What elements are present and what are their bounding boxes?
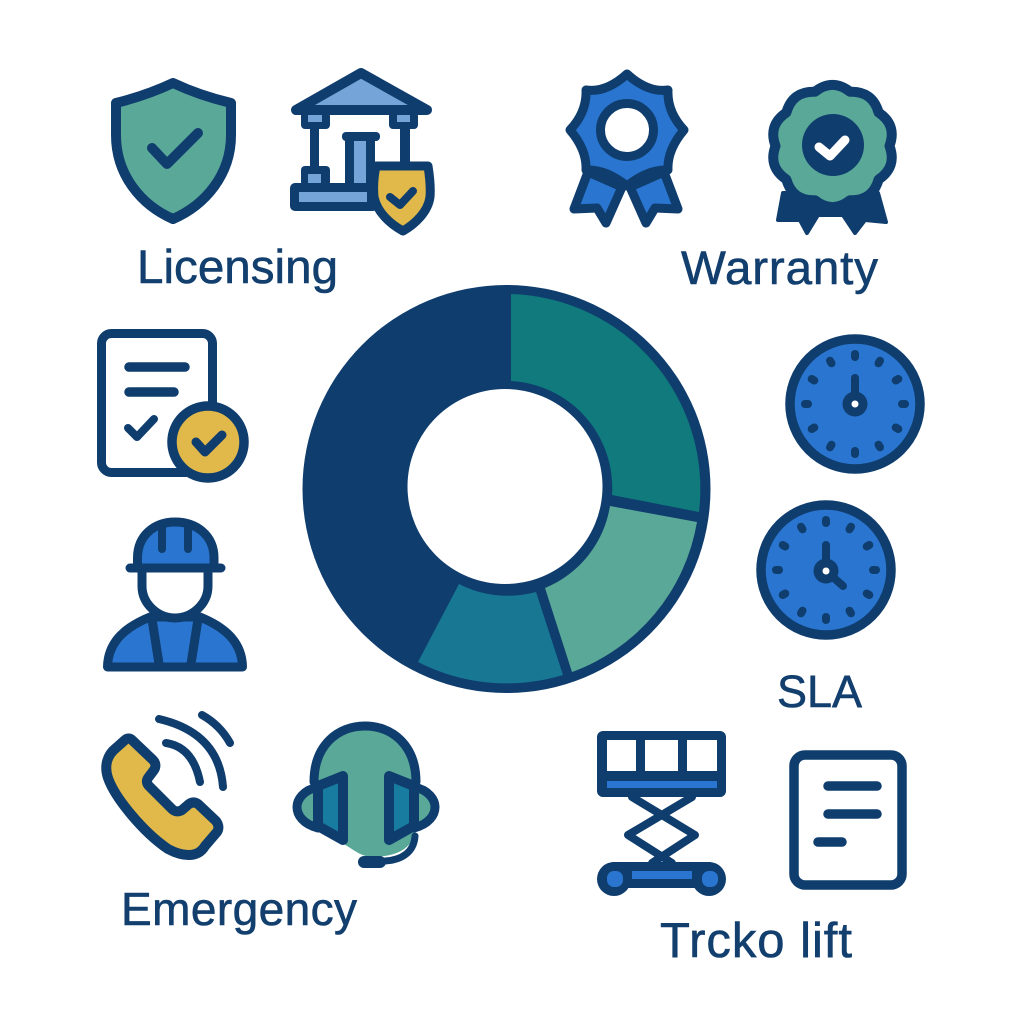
- icon: green shield: [116, 83, 231, 219]
- icon: headset: [297, 726, 435, 867]
- label: Emergency: Emergency: [121, 883, 357, 935]
- icon: blue ribbon badge: [570, 74, 684, 223]
- icon: green seal badge: [773, 85, 892, 233]
- donut chart: [302, 285, 710, 693]
- icon: clock gauge upper: [790, 339, 920, 469]
- icon: bank with shield: [290, 73, 430, 231]
- label: Licensing: Licensing: [137, 241, 338, 294]
- label: Trcko lift: Trcko lift: [660, 914, 852, 968]
- icon: checklist document: [102, 334, 244, 478]
- icon: clock gauge lower: [761, 505, 891, 635]
- icon: scissor lift: [597, 731, 726, 896]
- icon: telephone with signal waves: [106, 715, 230, 855]
- label: Warranty: Warranty: [681, 242, 878, 295]
- icon: document: [794, 755, 902, 885]
- icon: worker with hard hat: [108, 522, 242, 667]
- label: SLA: SLA: [777, 666, 862, 717]
